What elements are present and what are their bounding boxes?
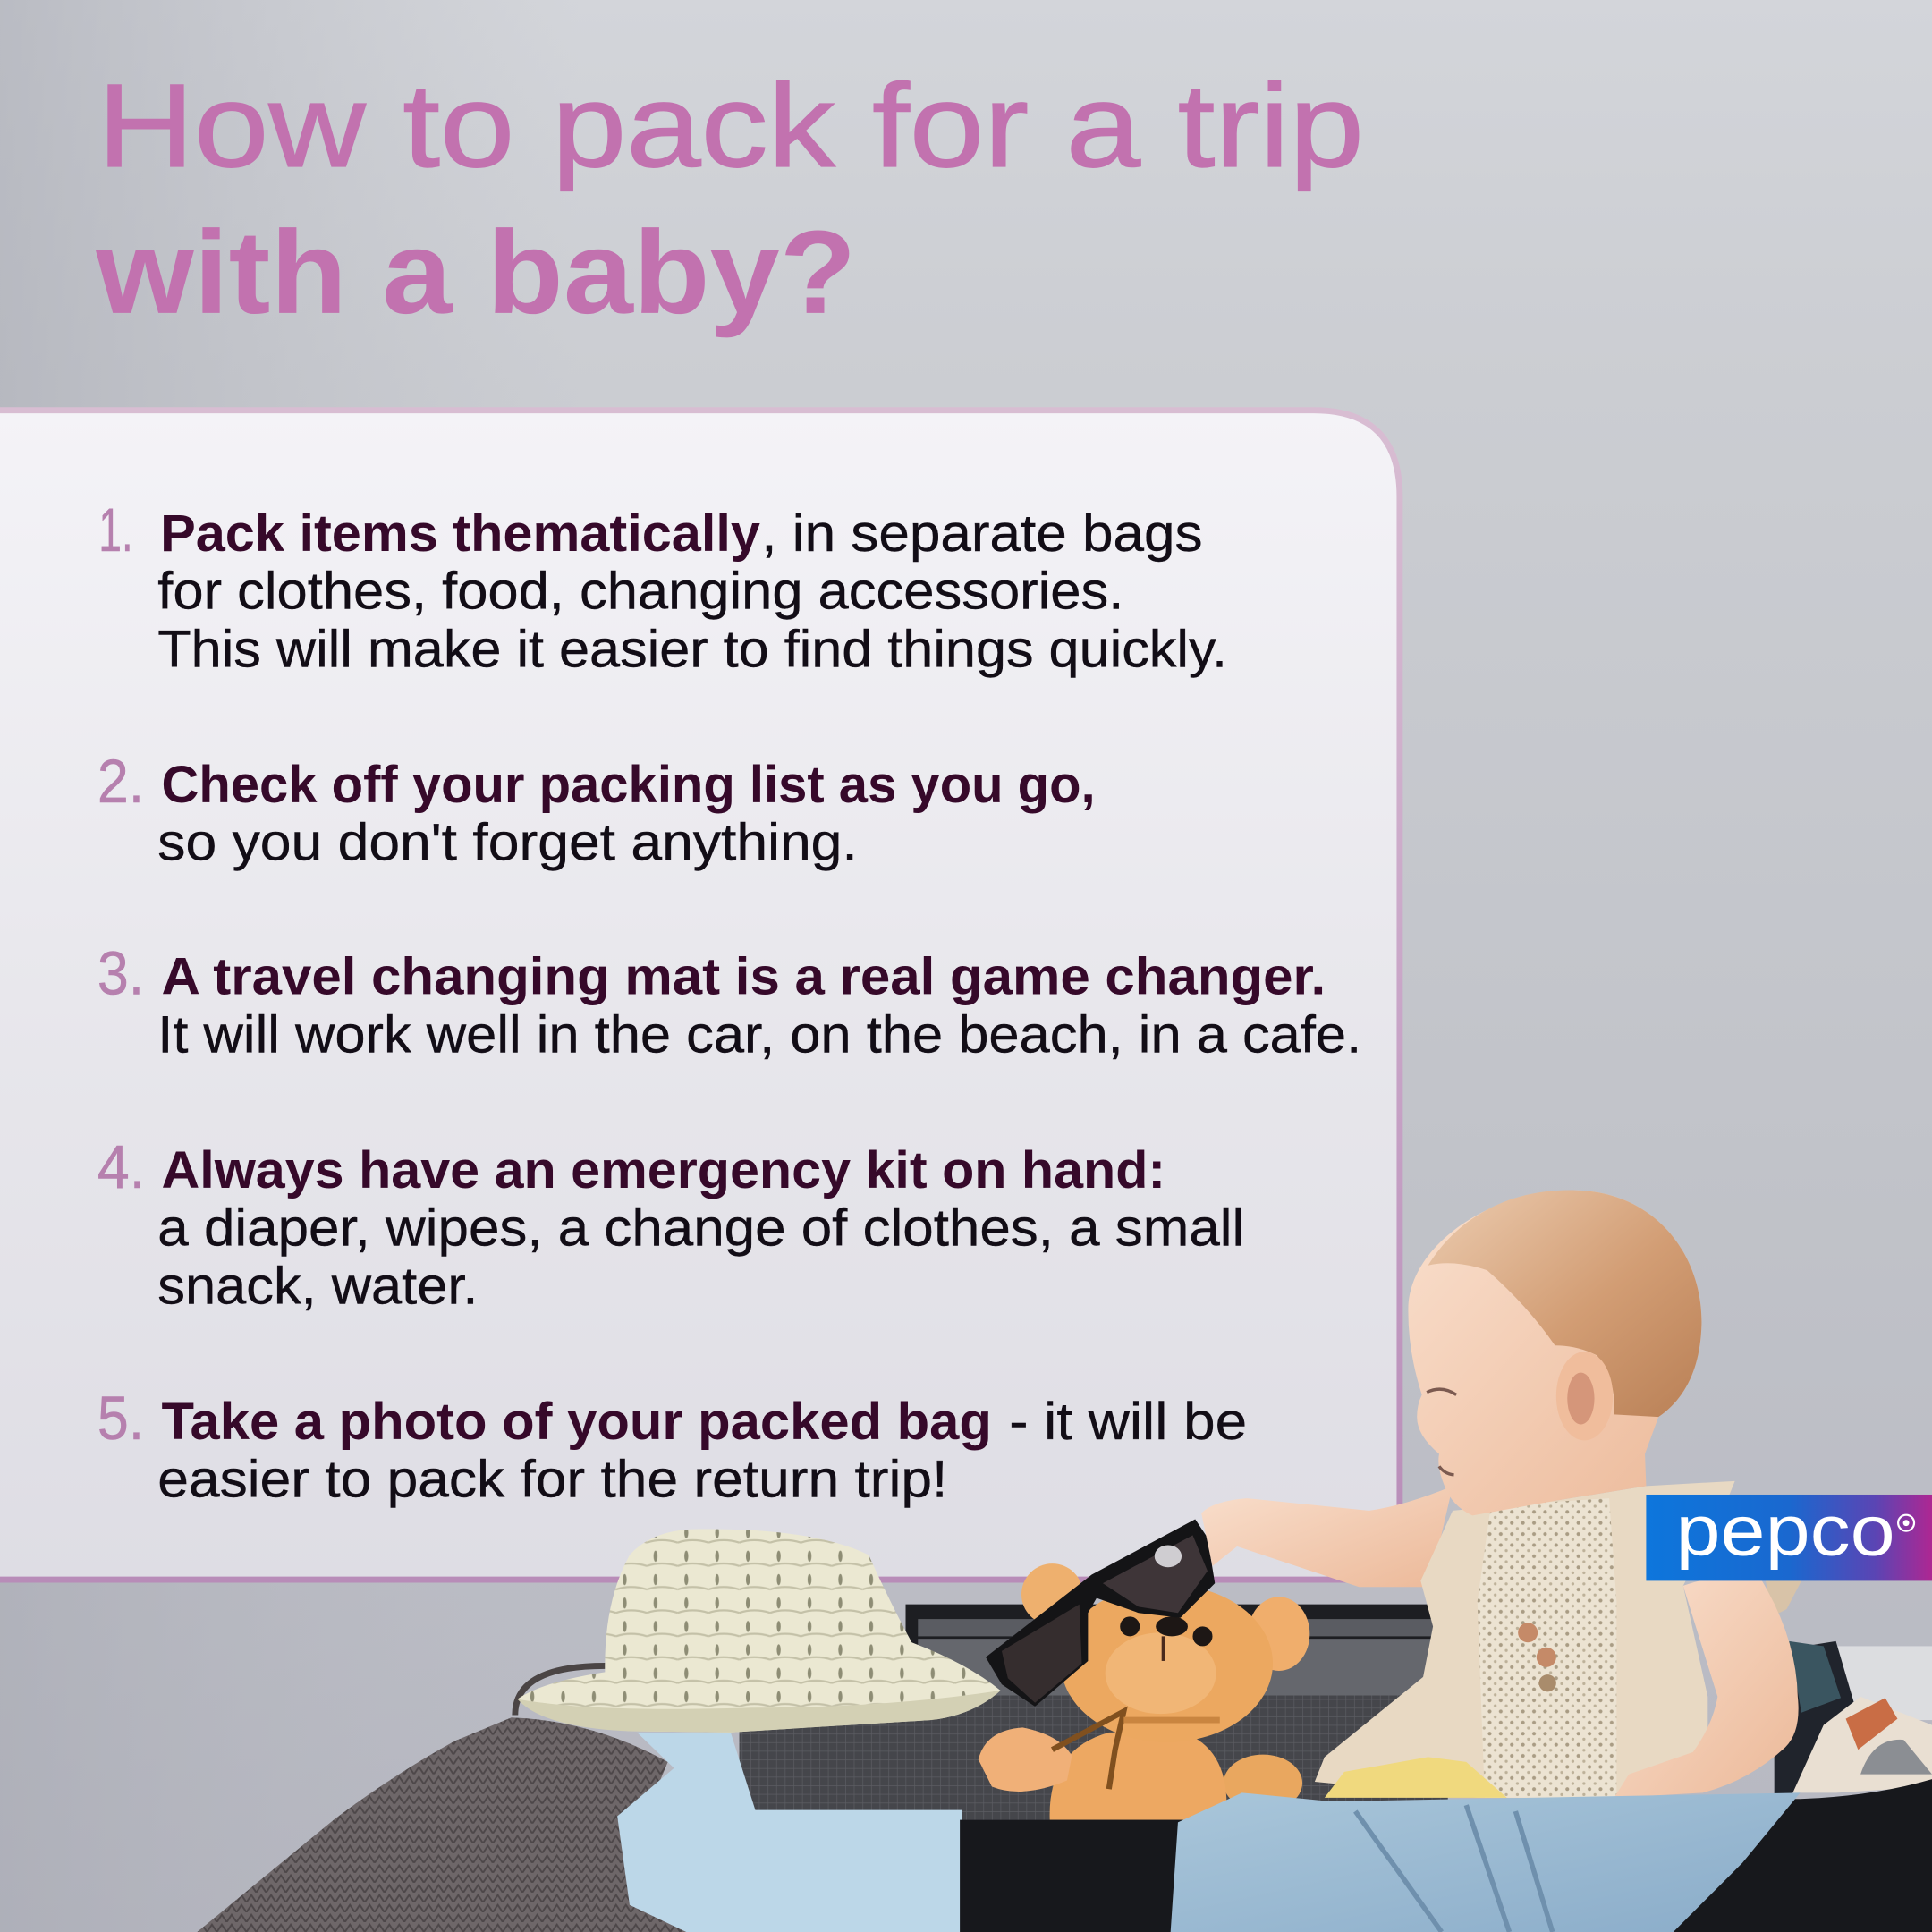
coat <box>197 1717 702 1932</box>
baby's dress <box>1315 1481 1735 1798</box>
tip 4: a diaper, wipes, a change of clothes, a small <box>157 1199 1244 1258</box>
straw hat <box>515 1529 1001 1733</box>
tip 4 <box>97 1132 1244 1315</box>
logo: pepco <box>1646 1490 1932 1580</box>
logo: pepco: pepco <box>1675 1490 1895 1570</box>
tip 3: A travel changing mat is a real game changer. <box>161 948 1326 1006</box>
tip 2: so you don't forget anything. <box>157 814 858 872</box>
panel: packing tips <box>0 411 1400 1580</box>
title: with a baby? <box>95 207 856 339</box>
tip 3: It will work well in the car, on the beach, in a cafe. <box>157 1005 1361 1063</box>
tip 2 <box>97 747 1096 872</box>
tip 4: snack, water. <box>157 1257 478 1315</box>
bead charm <box>1518 1623 1556 1691</box>
tip 1: Pack items thematically <box>160 504 760 563</box>
baby's head <box>1408 1191 1701 1515</box>
lace panel <box>1478 1498 1616 1798</box>
tip 3 <box>97 939 1361 1063</box>
tip 2: Check off your packing list as you go, <box>161 756 1096 814</box>
back ruffle <box>1766 1580 1801 1616</box>
baby's far arm <box>1201 1486 1453 1587</box>
tip 3: 3. <box>97 939 144 1008</box>
yellow cloth <box>1325 1757 1507 1798</box>
tip 5: Take a photo of your packed bag <box>161 1393 992 1451</box>
tip 2: 2. <box>97 747 144 816</box>
tip 5: - it will be <box>1009 1393 1247 1451</box>
tip 1: for clothes, food, changing accessories. <box>157 563 1123 621</box>
baby's near arm <box>1614 1577 1799 1798</box>
tip 1: 1. <box>98 496 133 564</box>
suitcase front <box>960 1779 1932 1932</box>
denim jacket <box>1171 1792 1801 1932</box>
tip 1: , in separate bags <box>761 504 1202 563</box>
tip 5 <box>97 1384 1247 1509</box>
tip 5: 5. <box>97 1384 144 1453</box>
tip 4: Always have an emergency kit on hand: <box>161 1141 1165 1199</box>
tip 4: 4. <box>97 1132 146 1201</box>
title: How to pack for a trip <box>97 60 1364 192</box>
title <box>95 60 1364 339</box>
sunglasses <box>986 1520 1215 1707</box>
eye and mouth <box>1427 1389 1456 1475</box>
tip 5: easier to pack for the return trip! <box>157 1451 947 1509</box>
tip 1: This will make it easier to find things quickly. <box>157 620 1227 678</box>
teddy bear <box>979 1563 1309 1820</box>
tip 1 <box>98 496 1227 678</box>
baby <box>1201 1191 1801 1798</box>
floral cloth <box>1792 1697 1932 1792</box>
suitcase interior <box>740 1605 1860 1824</box>
hair <box>1428 1191 1701 1417</box>
ear <box>1556 1352 1613 1440</box>
blue dress <box>617 1733 962 1932</box>
